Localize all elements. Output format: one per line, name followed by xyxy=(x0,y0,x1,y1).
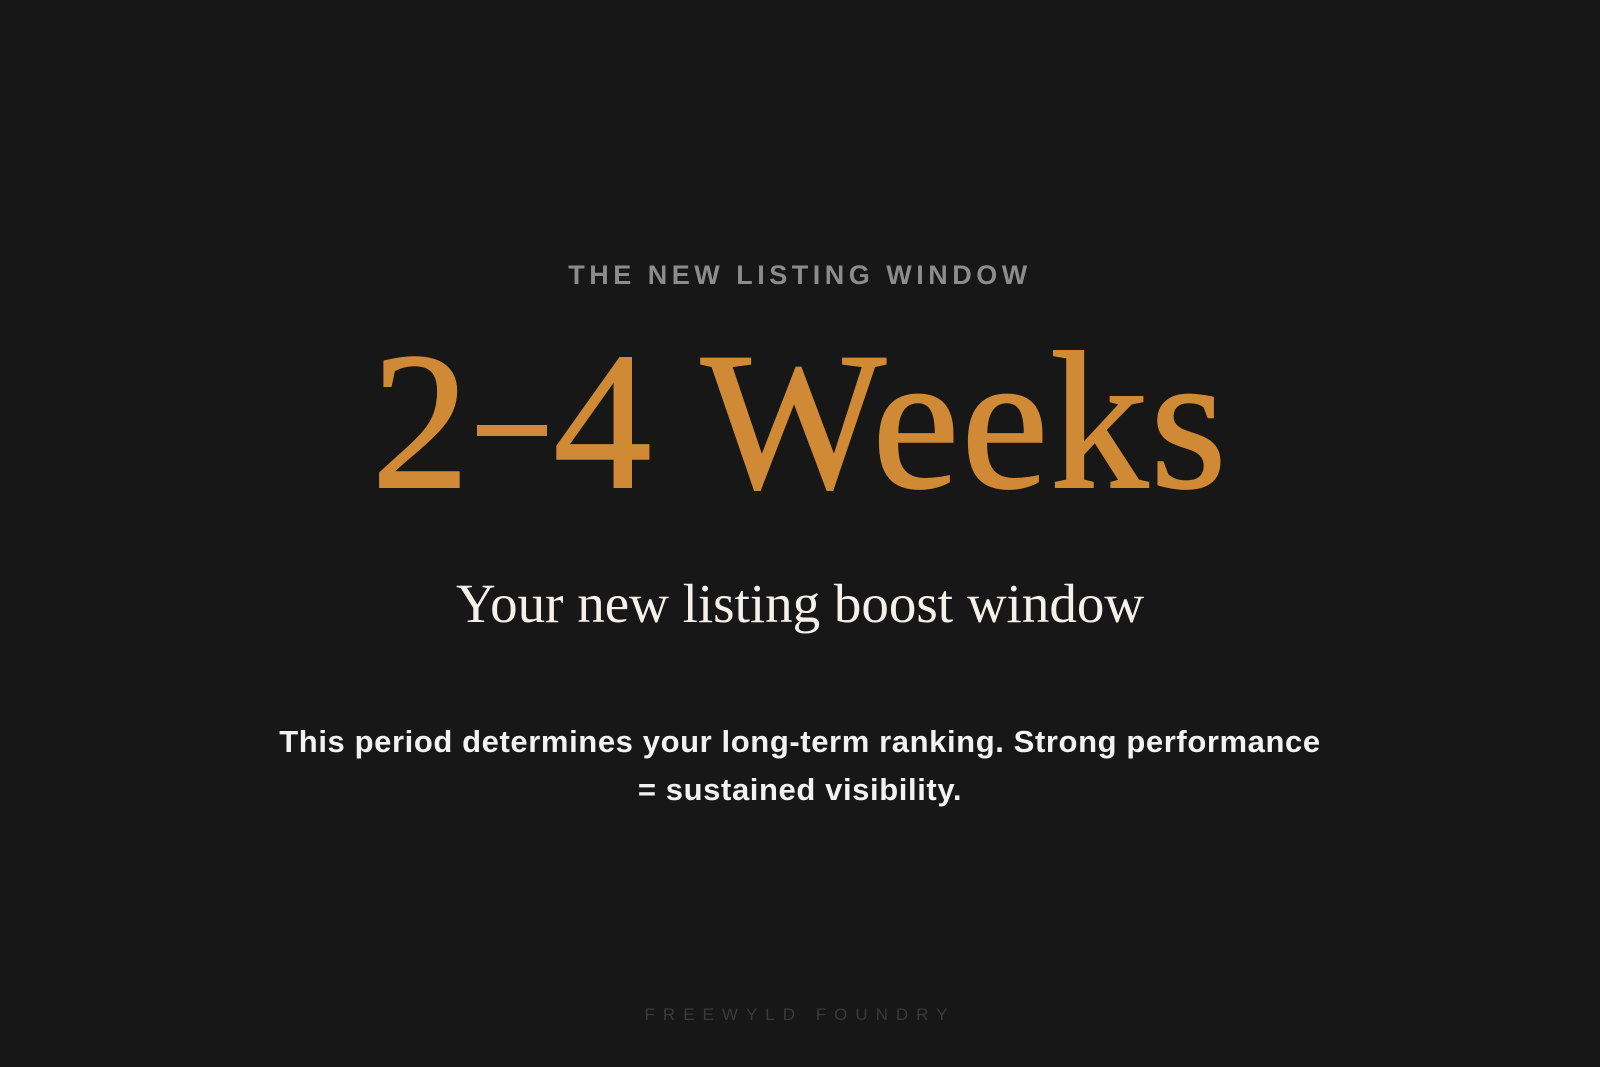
body text xyxy=(279,724,1321,807)
eyebrow label: THE NEW LISTING WINDOW xyxy=(568,260,1032,290)
subtitle: Your new listing boost window xyxy=(456,573,1144,634)
body text: = sustained visibility. xyxy=(638,772,962,807)
headline: 2-4 Weeks: 2 4 Weeks xyxy=(371,313,1229,530)
body text: This period determines your long-term ranking. Strong performance xyxy=(279,724,1321,759)
footer brand: FREEWYLD FOUNDRY xyxy=(645,1005,955,1024)
